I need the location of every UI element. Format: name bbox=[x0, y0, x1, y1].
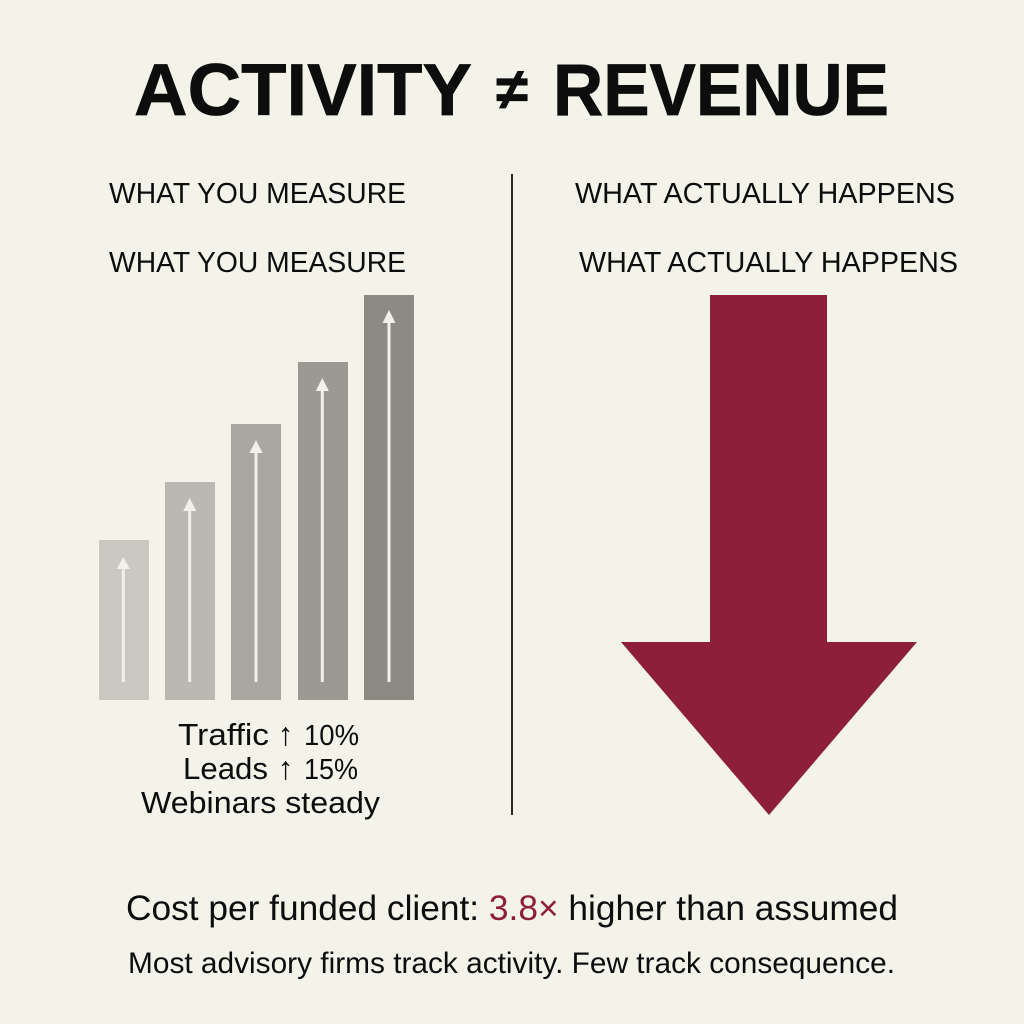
metric labels bbox=[141, 716, 381, 820]
traffic label bbox=[178, 716, 359, 752]
left heading 2: WHAT YOU MEASURE bbox=[109, 247, 406, 279]
bar 3 bbox=[231, 424, 281, 700]
traffic label: ↑ bbox=[278, 716, 294, 752]
bar 2 bbox=[165, 482, 215, 700]
bar 5 bbox=[364, 295, 414, 700]
center divider bbox=[511, 174, 513, 815]
title bbox=[134, 50, 889, 131]
bar 1 bbox=[99, 540, 149, 700]
leads label: Leads bbox=[183, 751, 268, 786]
bar chart bbox=[99, 295, 414, 700]
right heading 1: WHAT ACTUALLY HAPPENS bbox=[575, 178, 955, 210]
cost callout: Cost per funded client: 3.8× higher than assumed bbox=[126, 889, 898, 928]
right heading 2: WHAT ACTUALLY HAPPENS bbox=[579, 247, 958, 279]
bar 4 bbox=[298, 362, 348, 700]
traffic label: Traffic bbox=[178, 717, 269, 752]
title: REVENUE bbox=[553, 50, 889, 131]
big down arrow bbox=[621, 295, 917, 815]
traffic label: 10% bbox=[304, 720, 359, 752]
leads label bbox=[183, 750, 358, 786]
title: ACTIVITY bbox=[134, 50, 472, 131]
left heading 1: WHAT YOU MEASURE bbox=[109, 178, 406, 210]
footer note: Most advisory firms track activity. Few track consequence. bbox=[128, 947, 895, 980]
leads label: ↑ bbox=[278, 750, 294, 786]
title: ≠ bbox=[496, 57, 528, 122]
leads label: 15% bbox=[304, 754, 358, 786]
webinars label: Webinars steady bbox=[141, 785, 381, 820]
